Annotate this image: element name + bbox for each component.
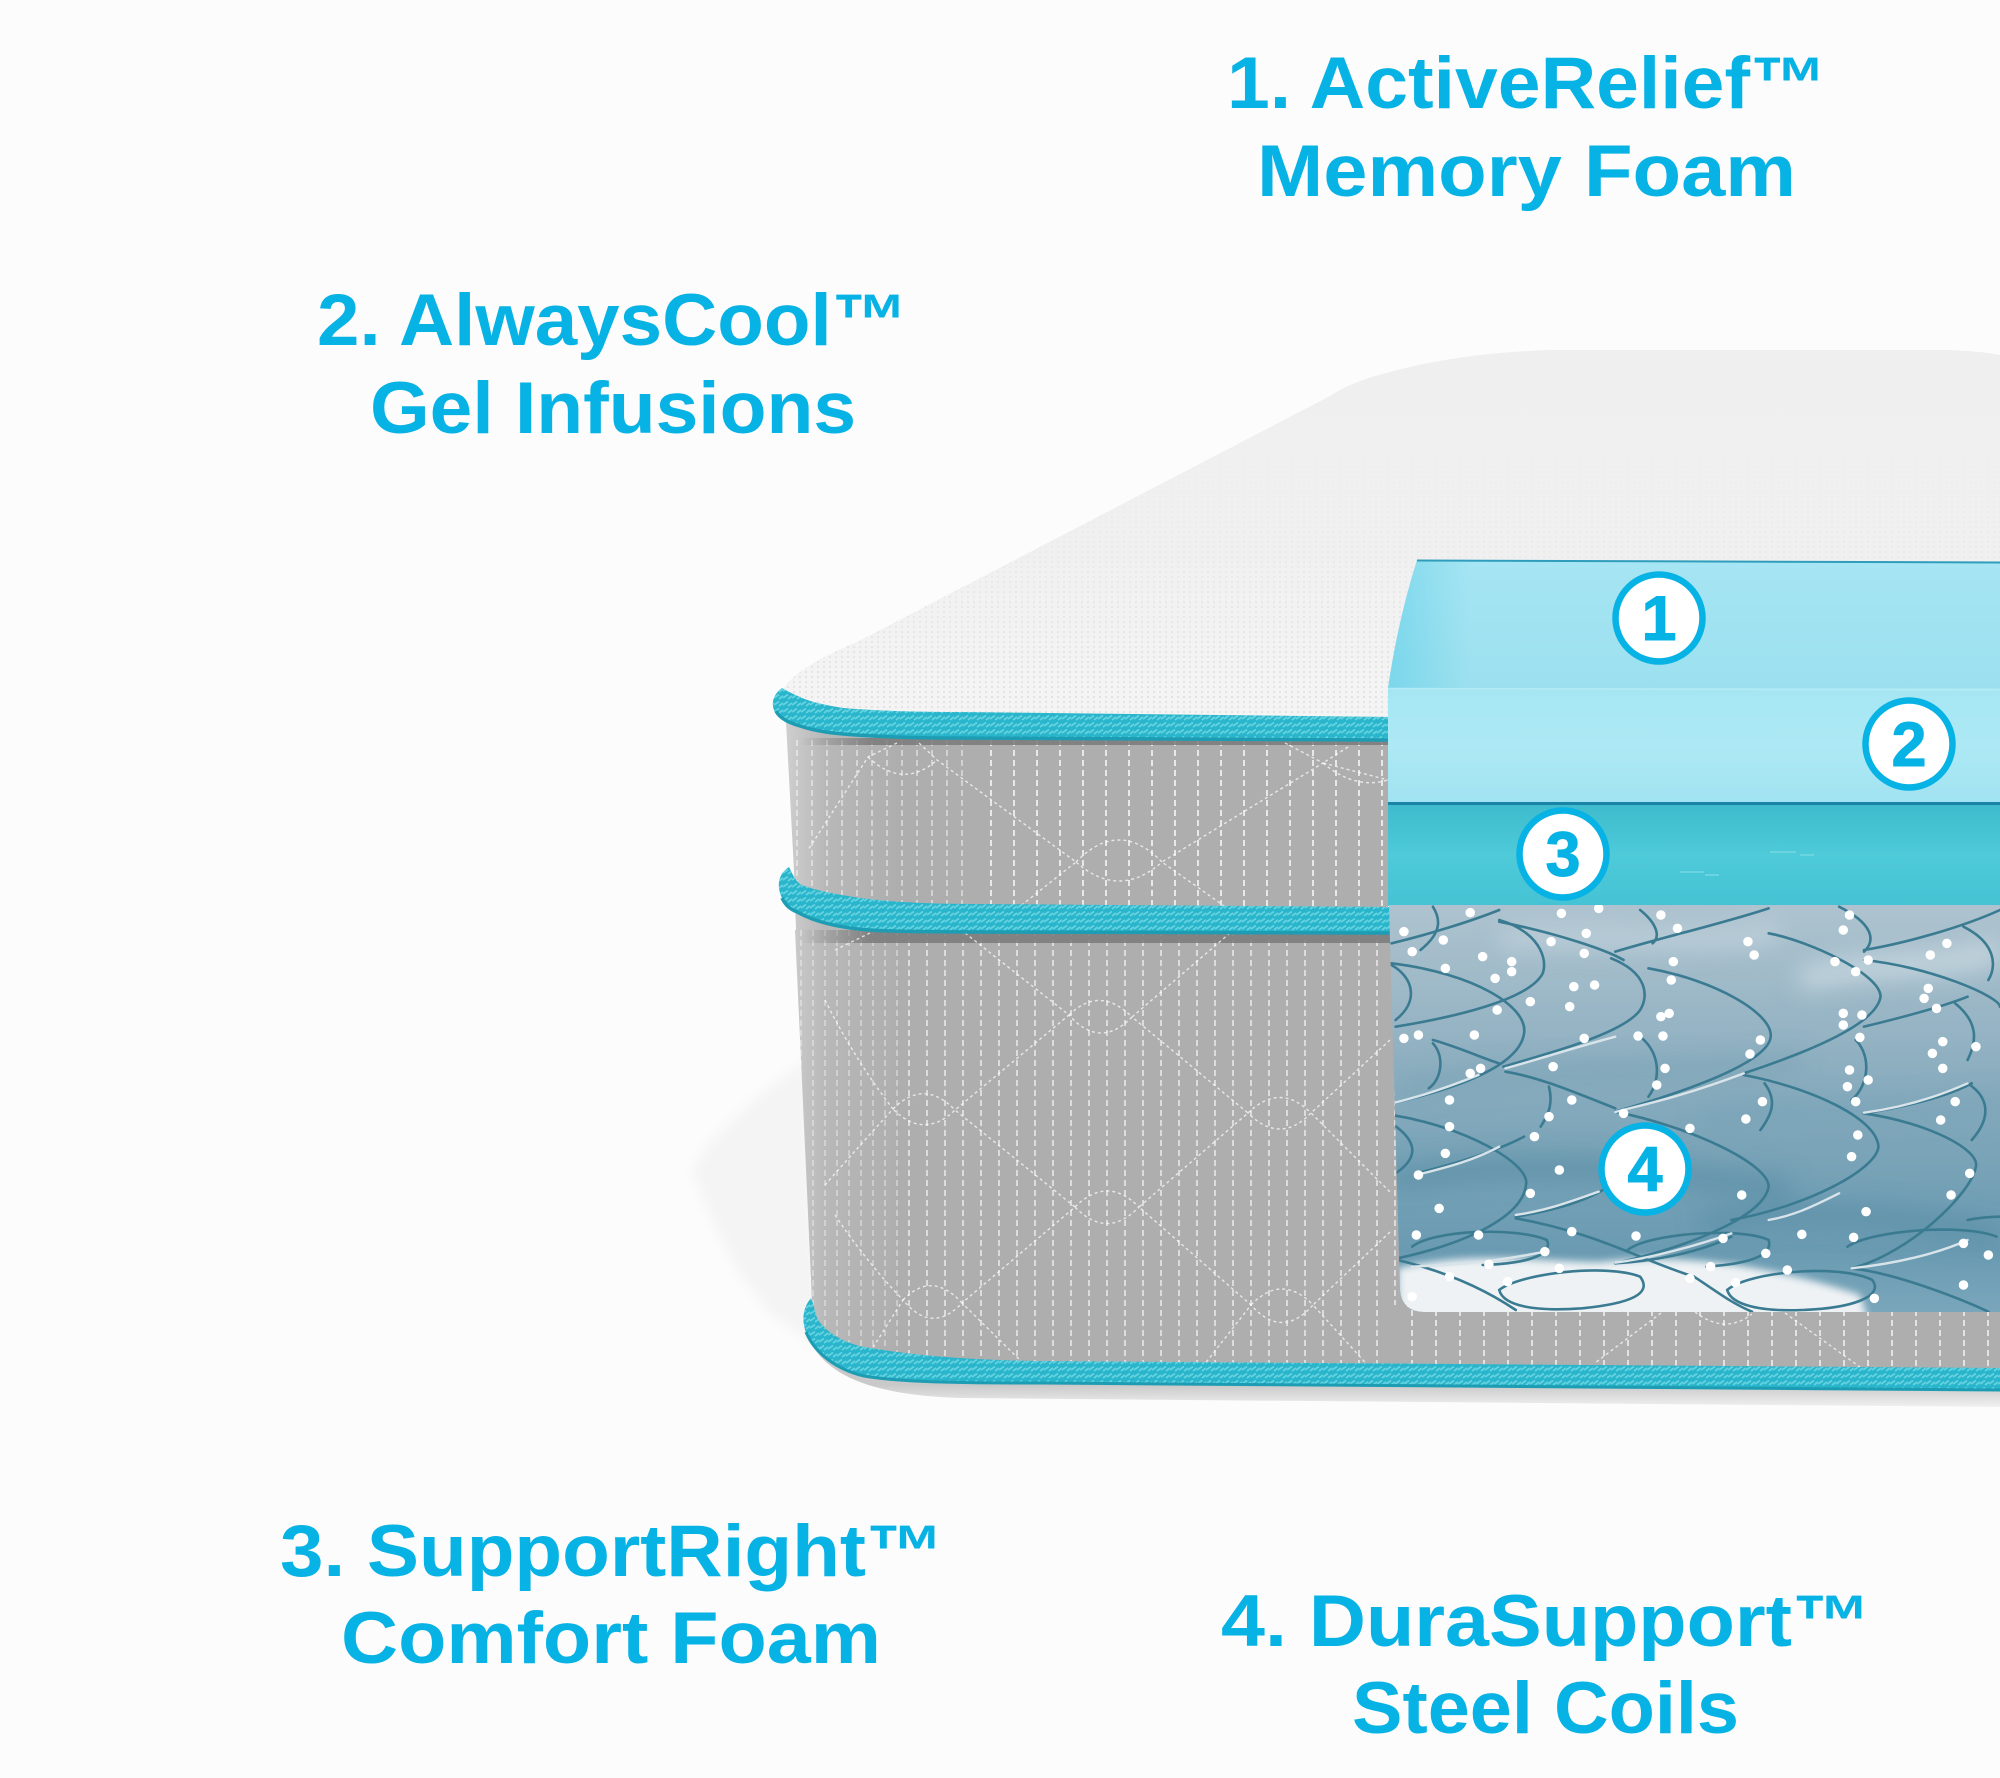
bottom piping: [803, 1298, 2000, 1391]
label 1: ActiveRelief Memory Foam: 1. ActiveRelief™: [1227, 43, 1827, 124]
number badge 3: 3: [1545, 820, 1581, 890]
top piping: [773, 688, 1390, 741]
label 4: DuraSupport Steel Coils: [1221, 1581, 1871, 1749]
number badge 4: 4: [1627, 1135, 1663, 1205]
dark line between layers 2 and 3: [1388, 802, 2000, 805]
lower panel quilting: [825, 933, 1390, 1370]
coil highlights: [1391, 1037, 1968, 1268]
mattress top surface: [782, 350, 2000, 735]
foam layer 1: memory foam: [1388, 560, 2000, 690]
label 2: AlwaysCool Gel Infusions: Gel Infusions: [370, 368, 856, 449]
foam scuffs: [1680, 852, 1814, 875]
number badge 2: 2: [1891, 710, 1927, 780]
label 1: ActiveRelief Memory Foam: [1227, 43, 1827, 212]
bottom strip under coils: [1388, 1305, 2000, 1377]
foam layer 3: comfort foam: [1388, 804, 2000, 906]
label 2: AlwaysCool Gel Infusions: [317, 280, 908, 449]
upper side panel: [786, 722, 1388, 908]
lower side panel: [795, 905, 1410, 1376]
floor shadow: bottom: [812, 1345, 2000, 1407]
number badge 2: [1866, 700, 1952, 788]
foam layer 2: gel infusions: [1388, 688, 2000, 804]
foam top edge: [1417, 560, 2000, 562]
label 3: SupportRight Comfort Foam: [280, 1511, 944, 1679]
label 4: DuraSupport Steel Coils: 4. DuraSupport™: [1221, 1581, 1871, 1662]
middle piping: [779, 867, 1390, 934]
number badge 3: [1520, 810, 1606, 898]
upper panel quilting: [808, 743, 1388, 908]
shading bands: [1390, 930, 2000, 1235]
label 3: SupportRight Comfort Foam: Comfort Foam: [341, 1598, 881, 1679]
coil window: steel coils: [1385, 900, 2000, 1320]
mattress illustration: [692, 350, 2000, 1407]
number badge 1: [1616, 574, 1702, 662]
label 1: ActiveRelief Memory Foam: Memory Foam: [1257, 131, 1796, 212]
floor shadow: left: [692, 1060, 820, 1350]
label 2: AlwaysCool Gel Infusions: 2. AlwaysCool™: [317, 280, 908, 361]
coil wires: [1391, 907, 2000, 1312]
label 4: DuraSupport Steel Coils: Steel Coils: [1352, 1668, 1739, 1749]
white mattress base under coils: [1398, 1258, 1868, 1320]
coil glints: [1404, 908, 1988, 1298]
number badge 4: [1602, 1126, 1688, 1212]
seam between layers 1 and 2: [1388, 688, 2000, 690]
label 3: SupportRight Comfort Foam: 3. SupportRight™: [280, 1511, 944, 1592]
number badge 1: 1: [1641, 584, 1677, 654]
